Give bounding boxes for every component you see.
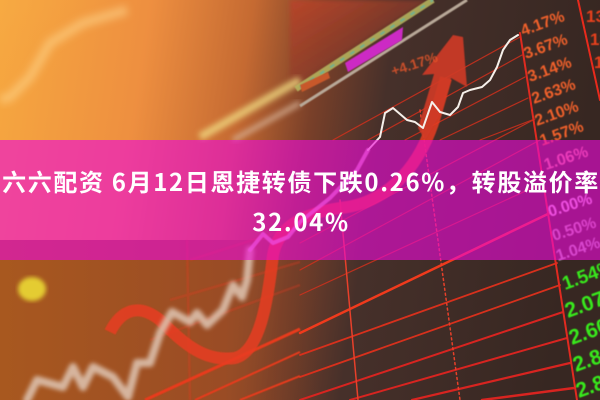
percent axis labels, red: 1.06% xyxy=(542,144,590,174)
percent axis labels, red: +4.17% xyxy=(389,49,440,79)
right column red numbers xyxy=(586,7,600,72)
percent axis labels, red: 2.63% xyxy=(530,76,578,108)
percent axis labels, red xyxy=(389,8,600,265)
percent axis labels, red: 3.67% xyxy=(522,31,570,63)
percent axis labels, red: 0.00% xyxy=(546,191,594,221)
percent axis labels, red: 2.10% xyxy=(533,98,581,130)
white trend line xyxy=(27,35,518,400)
blurred upper-left trend line xyxy=(0,10,127,100)
percent axis labels, red: 0.50% xyxy=(550,215,598,245)
red chart grid xyxy=(300,0,600,400)
title banner xyxy=(0,140,600,260)
percent axis labels, red: 3.14% xyxy=(526,54,574,86)
blurred grid on lower left xyxy=(145,225,300,400)
percent axis labels, red: 1.57% xyxy=(538,118,586,150)
percent axis labels, green xyxy=(560,257,600,400)
coloured ticker band xyxy=(200,0,467,140)
title text: 六六配资 6月12日恩捷转债下跌0.26%，转股溢价率32.04% xyxy=(2,163,600,238)
percent axis labels, red: 4.17% xyxy=(519,8,567,40)
big red rising arrow xyxy=(110,35,467,359)
yellow lens flare xyxy=(18,277,46,301)
